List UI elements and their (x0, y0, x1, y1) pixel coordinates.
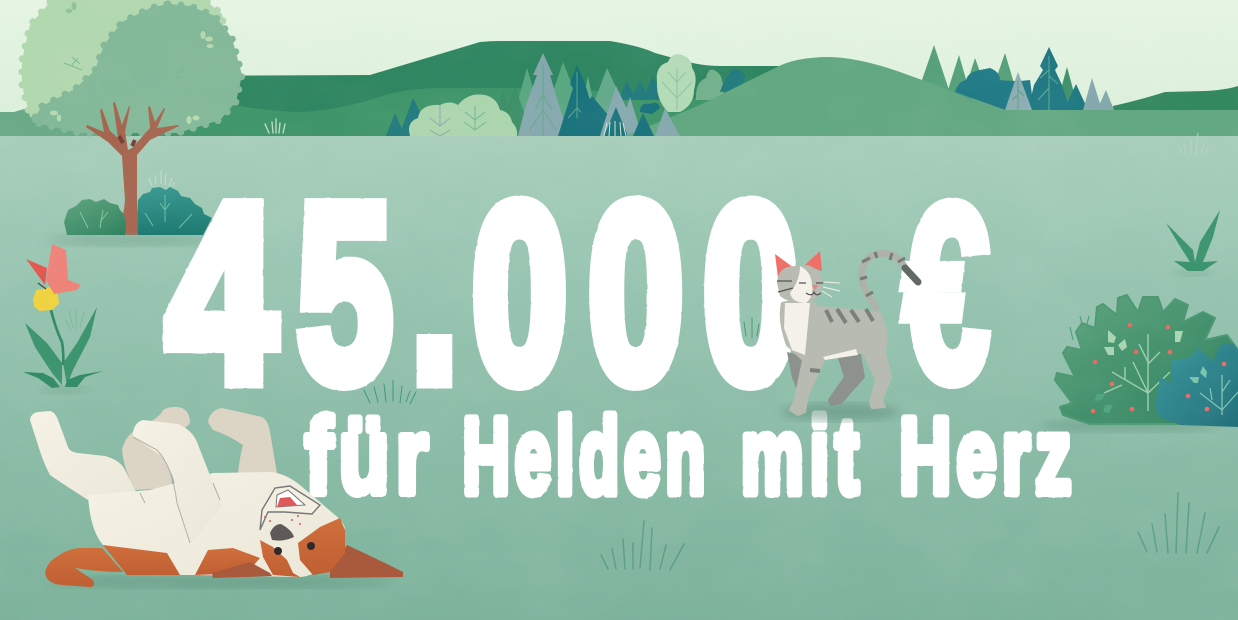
cat back legs (829, 355, 864, 405)
headline: subtitle (305, 395, 1077, 517)
tuft hill (265, 119, 285, 133)
dog patches (103, 545, 180, 575)
tuft behind shrubs (149, 170, 175, 186)
cat body (781, 298, 891, 415)
green shrub (64, 199, 126, 235)
cat stripes (810, 309, 873, 371)
cat (775, 251, 918, 421)
grass at flower (66, 308, 84, 330)
right big hill (625, 57, 1238, 136)
dog far legs (208, 408, 277, 473)
dog muzzle (260, 486, 320, 530)
dark canopy (32, 4, 242, 133)
flower stem (51, 310, 63, 365)
right bushes (1040, 295, 1238, 432)
tuft bottom centre (601, 521, 684, 570)
dog ears (212, 562, 272, 578)
ground meadow (0, 136, 1238, 620)
landscape: hills and forest (0, 41, 1238, 136)
headline: amount: € (903, 153, 990, 434)
shrubs beneath tree (45, 170, 215, 246)
forest centre (386, 53, 745, 136)
green bush (1055, 295, 1238, 424)
dog body (88, 472, 345, 577)
cat tail (862, 253, 905, 310)
headline: subtitle: Helden (463, 395, 710, 516)
back dark hill (120, 41, 790, 136)
grass tufts (265, 119, 1219, 570)
teal shrub (138, 187, 212, 235)
cat head (777, 265, 823, 303)
tuft centre (364, 380, 416, 404)
dog left leg (30, 411, 145, 510)
grass at bush (1070, 316, 1089, 340)
teal bush (1155, 343, 1238, 427)
headline: amount: 4 (167, 151, 276, 434)
flower leaves (25, 323, 62, 385)
tuft in zero (744, 318, 759, 338)
tuft upper right (1179, 133, 1208, 154)
dog (30, 407, 403, 588)
cat chest (784, 303, 810, 355)
dog eyes (274, 547, 282, 555)
right leaf plant (1166, 210, 1220, 276)
canopy leaves (50, 2, 214, 124)
dog front leg (133, 420, 222, 545)
mid green hill (120, 88, 720, 136)
headline: subtitle: für (305, 397, 434, 517)
right dark hill (1113, 86, 1238, 110)
flower head (34, 288, 58, 310)
forest right (922, 45, 1114, 110)
dog head patches (298, 518, 345, 575)
dog tail (45, 548, 123, 587)
flower and butterfly (23, 244, 103, 394)
tuft bottom right (1138, 493, 1219, 553)
cat ears (775, 254, 794, 278)
headline: subtitle: mit (741, 396, 865, 517)
butterfly (26, 259, 47, 285)
headline: amount (167, 151, 990, 434)
trunk and branches (86, 102, 179, 235)
headline: subtitle: Herz (899, 397, 1077, 517)
light canopy (22, 0, 230, 130)
sky (0, 0, 1238, 137)
headline: amount: 5.000 (297, 152, 798, 434)
big tree (22, 0, 242, 235)
left low hill (0, 109, 130, 136)
forest foreground small trees (633, 113, 654, 136)
dog nose (270, 524, 294, 541)
